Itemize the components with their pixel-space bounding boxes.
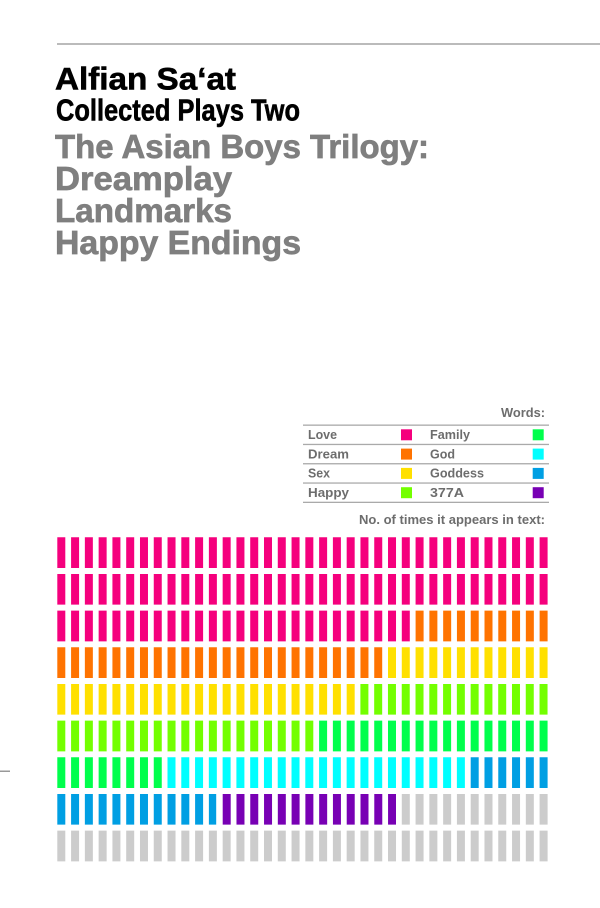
tally: Goddess [57, 773, 548, 809]
tally: God [168, 757, 465, 788]
tally: Dream [57, 626, 548, 663]
subtitle: trilogy and play names: Happy Endings [55, 224, 301, 261]
legend [303, 406, 549, 527]
tally: 377A [223, 794, 396, 825]
title: author and collection: Alfian Sa‘at [55, 60, 237, 96]
title: author and collection [55, 60, 300, 128]
tally: Family [57, 736, 548, 773]
title: author and collection: Collected Plays Two [56, 94, 300, 128]
legend labels: Happy [308, 486, 349, 500]
legend labels: 377A [430, 486, 464, 500]
subtitle: trilogy and play names: The Asian Boys Trilogy: [55, 128, 429, 165]
subtitle: trilogy and play names [55, 128, 429, 261]
legend heading: Words: [501, 406, 545, 420]
tally: Love [57, 553, 548, 626]
legend labels [308, 428, 484, 500]
tally: remaining unused [57, 809, 548, 846]
legend labels: Dream [308, 447, 349, 461]
tally: Sex [57, 663, 548, 699]
legend labels: God [430, 447, 455, 461]
legend labels: Sex [308, 467, 330, 481]
tally: Happy [57, 699, 548, 736]
chart caption: No. of times it appears in text: [359, 513, 545, 527]
legend labels: Love [308, 428, 337, 442]
subtitle: trilogy and play names: Dreamplay [55, 160, 233, 197]
legend labels: Family [430, 428, 470, 442]
bar chart: word frequency tally [57, 553, 548, 846]
subtitle: trilogy and play names: Landmarks [55, 192, 232, 229]
legend labels: Goddess [430, 467, 484, 481]
legend colour swatches [401, 429, 544, 498]
